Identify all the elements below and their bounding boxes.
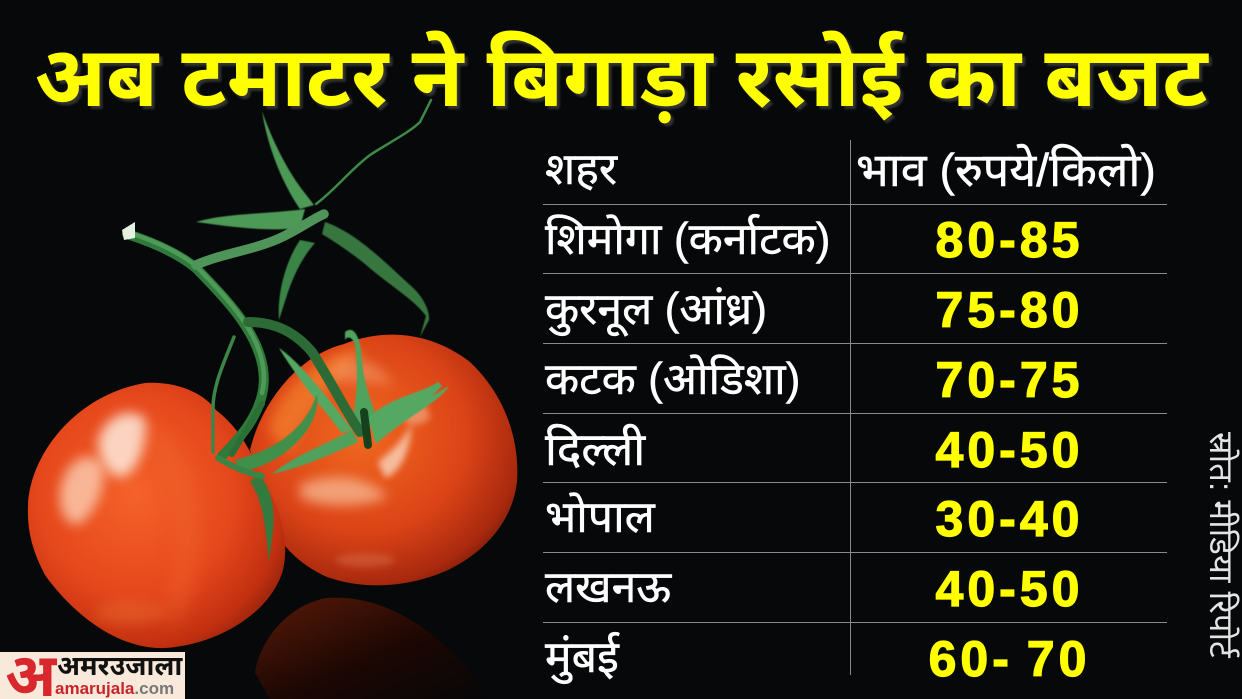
- vine and calyx: [122, 100, 449, 562]
- photo: tomatoes on the vine: [28, 98, 518, 699]
- table rules: [850, 140, 851, 675]
- row: Bhopal: भोपाल: [545, 493, 655, 542]
- price: Cuttack: 70-75: [936, 352, 1083, 408]
- row: Mumbai: मुंबई: [545, 633, 619, 682]
- logo: Amar Ujala: [0, 652, 185, 699]
- left tomato: [28, 383, 285, 648]
- tomato reflection: [255, 598, 490, 699]
- price: Shimoga: 80-85: [936, 212, 1083, 268]
- right tomato: [250, 335, 517, 585]
- table header: price: भाव (रुपये/किलो): [856, 144, 1156, 196]
- source note: स्रोत: मीडिया रिपोर्ट: [1203, 432, 1240, 658]
- row: Kurnool: कुरनूल (आंध्र): [545, 285, 767, 334]
- row: Shimoga: शिमोगा (कर्नाटक): [545, 215, 831, 264]
- price: Mumbai: 60- 70: [929, 631, 1090, 687]
- price table: [545, 144, 1156, 196]
- logo url: amarujala.com: [55, 679, 174, 698]
- row: Lucknow: लखनऊ: [545, 563, 671, 612]
- price: Bhopal: 30-40: [936, 491, 1083, 547]
- leaves: [196, 111, 449, 562]
- price: Kurnool: 75-80: [936, 282, 1083, 338]
- price: Lucknow: 40-50: [936, 561, 1083, 617]
- row: Delhi: दिल्ली: [545, 423, 645, 475]
- title: अब टमाटर ने बिगाड़ा रसोई का बजट: [34, 30, 1208, 124]
- price: Delhi: 40-50: [936, 422, 1083, 478]
- table header: city: शहर: [545, 145, 617, 194]
- row: Cuttack: कटक (ओडिशा): [545, 355, 800, 404]
